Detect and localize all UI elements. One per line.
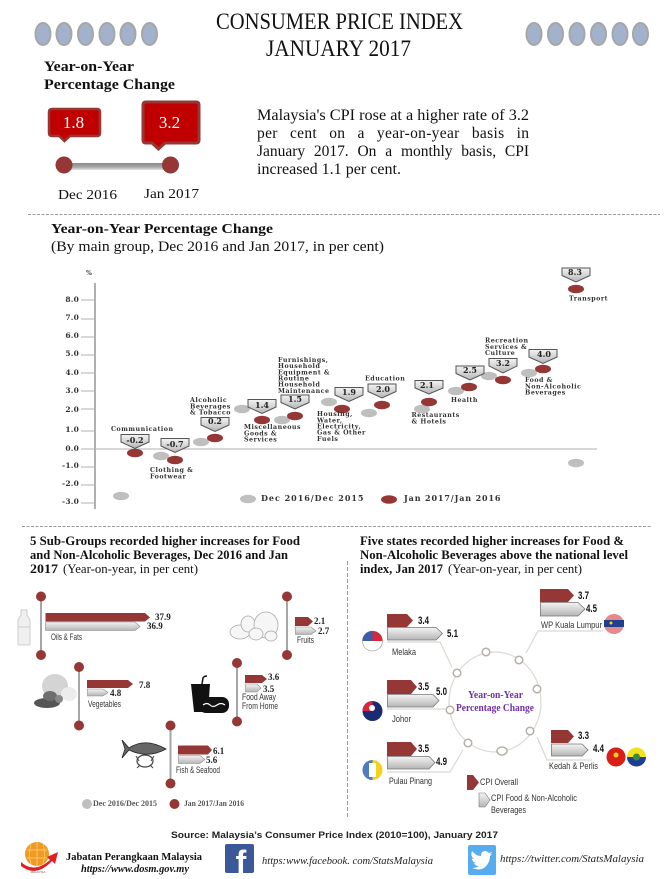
category labels: Gas & Other bbox=[317, 430, 366, 436]
summary paragraph: per cent on a year-on-year basis in bbox=[257, 125, 529, 142]
state: Pulau Pinang: 3.5 bbox=[418, 743, 429, 755]
value badges: 0.2 bbox=[208, 416, 222, 426]
summary paragraph: January 2017. On a monthly basis, CPI bbox=[257, 143, 529, 160]
value badges: 2.1 bbox=[420, 380, 434, 390]
category labels: Furnishings, bbox=[278, 357, 328, 364]
value badges: 1.9 bbox=[342, 387, 356, 397]
category labels: Health bbox=[451, 397, 478, 404]
category labels: Services & bbox=[485, 344, 527, 351]
state: WP Kuala Lumpur: WP Kuala Lumpur bbox=[541, 620, 602, 631]
heading: main group chart: (By main group, Dec 2016 and Jan 2017, in per cent) bbox=[51, 239, 384, 255]
oils & fats: 36.9 bbox=[147, 621, 163, 631]
value badges: 2.0 bbox=[376, 384, 390, 394]
panel: sub-groups bbox=[18, 534, 330, 809]
heading: main group chart bbox=[51, 221, 384, 255]
state: Pulau Pinang: 4.9 bbox=[436, 756, 447, 768]
value badges: -0.7 bbox=[166, 439, 184, 449]
connector ring bbox=[387, 631, 603, 772]
category labels: & Hotels bbox=[412, 418, 446, 426]
state: Melaka: 5.1 bbox=[447, 628, 458, 640]
grey dots: Dec 2016/Dec 2015 bbox=[113, 369, 584, 500]
states legend bbox=[467, 775, 577, 816]
category labels: Communication bbox=[111, 426, 174, 433]
title: JANUARY 2017 bbox=[266, 36, 411, 61]
states heading: index, Jan 2017 bbox=[360, 562, 443, 576]
summary paragraph: Malaysia's CPI rose at a higher rate of 3.2 bbox=[257, 107, 529, 124]
state: Johor: 3.5 bbox=[418, 681, 429, 693]
category labels: Recreation bbox=[485, 338, 529, 344]
state: Kedah & Perlis: Kedah & Perlis bbox=[549, 761, 598, 772]
sub-groups heading: 5 Sub-Groups recorded higher increases for Food bbox=[30, 534, 300, 548]
state: Pulau Pinang bbox=[362, 742, 447, 787]
category labels bbox=[111, 296, 608, 480]
source line: Source: Malaysia’s Consumer Price Index (2010=100), January 2017 bbox=[171, 830, 498, 841]
axis labels: 4.0 bbox=[65, 368, 79, 377]
category labels: Household bbox=[278, 363, 320, 370]
sub-groups legend bbox=[82, 799, 244, 809]
state: Pulau Pinang: Pulau Pinang bbox=[389, 776, 432, 787]
icon: department logo bbox=[21, 842, 58, 874]
state: Johor: 5.0 bbox=[436, 686, 447, 698]
category labels: Footwear bbox=[150, 474, 186, 480]
axis labels: 0.0 bbox=[65, 444, 79, 453]
axis labels: 1.0 bbox=[65, 425, 79, 434]
state: Johor bbox=[362, 680, 447, 725]
title bbox=[216, 9, 463, 61]
chart legend: Dec 2016/Dec 2015 bbox=[261, 493, 364, 503]
icon: twitter bbox=[468, 845, 496, 875]
states legend: CPI Overall bbox=[480, 777, 518, 788]
value badges: 4.0 bbox=[537, 349, 551, 359]
sub-groups heading: and Non-Alcoholic Beverages, Dec 2016 and Jan bbox=[30, 548, 288, 562]
category labels: Maintenance bbox=[278, 388, 330, 395]
axis labels: -1.0 bbox=[62, 461, 79, 470]
decorative ovals left bbox=[36, 23, 157, 45]
state: Melaka: 3.4 bbox=[418, 615, 430, 627]
value badges: 1.4 bbox=[255, 400, 269, 410]
axis labels: 7.0 bbox=[65, 313, 79, 322]
axis labels: 2.0 bbox=[65, 405, 79, 414]
panel: states bbox=[360, 534, 646, 816]
department name bbox=[66, 851, 202, 875]
category labels: Restaurants bbox=[412, 412, 460, 419]
ring centre label: Percentage Change bbox=[456, 703, 534, 714]
category labels: Beverages bbox=[525, 390, 566, 396]
fish & seafood bbox=[166, 720, 225, 788]
chart legend: Jan 2017/Jan 2016 bbox=[403, 493, 501, 503]
vegetables: Vegetables bbox=[88, 699, 121, 710]
fish & seafood: Fish & Seafood bbox=[176, 765, 220, 776]
category labels: Water, bbox=[316, 418, 343, 424]
category labels: Goods & bbox=[244, 430, 277, 438]
chart axes bbox=[81, 283, 597, 509]
food away from home: Food Away bbox=[242, 692, 276, 703]
timeline: headline CPI: Dec 2016 bbox=[58, 188, 117, 203]
fish & seafood: 6.1 bbox=[213, 746, 225, 756]
timeline: headline CPI: Jan 2017 bbox=[144, 187, 199, 202]
heading: year-on-year percentage change: Percentage Change bbox=[44, 77, 175, 93]
fruits: 2.1 bbox=[314, 616, 326, 626]
axis labels: % bbox=[86, 270, 92, 277]
category labels: Housing, bbox=[317, 411, 353, 418]
states legend: CPI Food & Non-Alcoholic bbox=[491, 793, 577, 804]
ring centre label bbox=[456, 690, 534, 714]
summary paragraph: increased 1.1 per cent. bbox=[257, 161, 401, 178]
heading: main group chart: Year-on-Year Percentage Change bbox=[51, 221, 273, 236]
category labels: Household bbox=[278, 382, 320, 388]
axis labels: -2.0 bbox=[62, 479, 79, 488]
category labels: Transport bbox=[569, 296, 608, 302]
sub-groups legend: Jan 2017/Jan 2016 bbox=[184, 799, 244, 808]
department name: Jabatan Perangkaan Malaysia bbox=[66, 851, 202, 863]
axis labels: 3.0 bbox=[65, 386, 79, 395]
icon: facebook bbox=[225, 844, 254, 879]
category labels: Miscellaneous bbox=[244, 424, 301, 431]
value badges: 8.3 bbox=[568, 267, 582, 277]
value badges: 3.2 bbox=[496, 358, 510, 368]
red dots: Jan 2017/Jan 2016 bbox=[127, 285, 584, 464]
facebook url: https:www.facebook. com/StatsMalaysia bbox=[262, 855, 433, 867]
value badges: 2.5 bbox=[463, 365, 477, 375]
category labels: Food & bbox=[525, 377, 553, 384]
fish & seafood: 5.6 bbox=[206, 755, 218, 765]
state: WP Kuala Lumpur: 4.5 bbox=[586, 603, 597, 615]
fruits: Fruits bbox=[297, 635, 314, 646]
category labels: Equipment & bbox=[278, 370, 330, 376]
category labels: Beverages bbox=[190, 404, 231, 410]
category labels: Culture bbox=[485, 350, 515, 357]
food away from home bbox=[232, 658, 280, 726]
category labels: Education bbox=[365, 376, 405, 382]
category labels: Clothing & bbox=[150, 467, 193, 474]
twitter url: https://twitter.com/StatsMalaysia bbox=[500, 853, 644, 865]
oils & fats: 37.9 bbox=[155, 612, 171, 622]
states legend: Beverages bbox=[491, 805, 526, 816]
state: Johor: Johor bbox=[392, 714, 411, 725]
vegetables: 7.8 bbox=[139, 680, 151, 690]
axis labels: 6.0 bbox=[65, 331, 79, 340]
axis labels: -3.0 bbox=[62, 497, 79, 506]
icon: department logo: MALAYSIA bbox=[31, 870, 45, 874]
sub-groups heading: (Year-on-year, in per cent) bbox=[63, 562, 198, 576]
ring nodes bbox=[446, 648, 541, 755]
category labels: & Tobacco bbox=[190, 410, 231, 416]
oils & fats: Oils & Fats bbox=[51, 632, 82, 643]
sub-groups legend: Dec 2016/Dec 2015 bbox=[93, 799, 157, 808]
category labels: Fuels bbox=[317, 436, 338, 443]
axis labels: 8.0 bbox=[65, 295, 79, 304]
timeline: headline CPI bbox=[49, 102, 199, 203]
state: WP Kuala Lumpur bbox=[540, 589, 624, 634]
chart: main group dot plot bbox=[62, 267, 608, 509]
axis labels: 5.0 bbox=[65, 349, 79, 358]
icon: vegetables bbox=[34, 674, 77, 708]
timeline: headline CPI: 1.8 bbox=[63, 113, 84, 132]
vegetables: 4.8 bbox=[110, 688, 122, 698]
chart legend bbox=[240, 493, 501, 504]
state: WP Kuala Lumpur: 3.7 bbox=[578, 590, 589, 602]
states heading: (Year-on-year, in per cent) bbox=[448, 562, 582, 576]
fruits: 2.7 bbox=[318, 626, 330, 636]
state: Kedah & Perlis bbox=[549, 730, 646, 772]
state: Kedah & Perlis: 4.4 bbox=[593, 743, 605, 755]
food away from home: 3.6 bbox=[268, 672, 280, 682]
value badges bbox=[121, 267, 590, 452]
state: Kedah & Perlis: 3.3 bbox=[578, 730, 589, 742]
title: CONSUMER PRICE INDEX bbox=[216, 9, 463, 34]
states heading bbox=[360, 534, 629, 576]
vegetables bbox=[74, 662, 151, 730]
food away from home: From Home bbox=[242, 701, 278, 712]
state: Melaka: Melaka bbox=[392, 647, 417, 658]
icon: food away from home bbox=[191, 676, 229, 713]
decorative ovals right bbox=[526, 23, 648, 45]
summary paragraph bbox=[257, 107, 529, 178]
ring centre label: Year-on-Year bbox=[468, 690, 523, 701]
category labels: Non-Alcoholic bbox=[525, 384, 581, 390]
sub-groups heading: 2017 bbox=[30, 562, 58, 576]
states heading: Five states recorded higher increases for Food & bbox=[360, 534, 624, 548]
department name: https://www.dosm.gov.my bbox=[81, 863, 189, 875]
value badges: 1.5 bbox=[288, 394, 302, 404]
fruits bbox=[282, 592, 330, 660]
food away from home: 3.5 bbox=[263, 684, 275, 694]
states heading: Non-Alcoholic Beverages above the national level bbox=[360, 548, 629, 562]
sub-groups heading bbox=[30, 534, 300, 576]
icon: facebook: f bbox=[236, 844, 247, 879]
icon: fruits bbox=[230, 612, 278, 641]
value badges: -0.2 bbox=[126, 435, 144, 445]
oils & fats bbox=[36, 592, 171, 660]
category labels: Services bbox=[244, 436, 277, 444]
category labels: Routine bbox=[278, 376, 309, 382]
timeline: headline CPI: 3.2 bbox=[159, 113, 180, 132]
state: Melaka bbox=[362, 614, 458, 658]
category labels: Electricity, bbox=[317, 424, 361, 430]
icon: oil bottle bbox=[18, 610, 30, 645]
heading: year-on-year percentage change: Year-on-Year bbox=[44, 59, 134, 75]
category labels: Alcoholic bbox=[189, 397, 227, 404]
axis labels bbox=[62, 270, 92, 506]
icon: fish and crab bbox=[122, 740, 166, 768]
heading: year-on-year percentage change bbox=[44, 59, 175, 93]
